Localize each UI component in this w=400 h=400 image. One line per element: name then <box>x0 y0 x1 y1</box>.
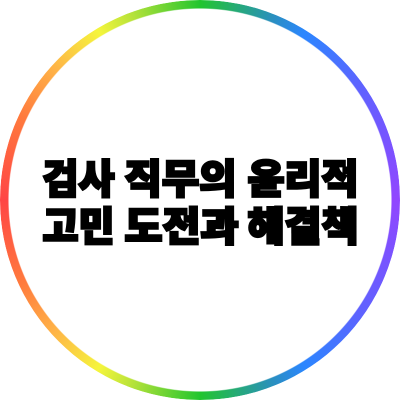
title line 1: 검사 <box>42 158 115 202</box>
title line 2: 해결책 <box>248 206 358 250</box>
title line 1: 직무의 <box>124 158 236 202</box>
title line 1 <box>42 158 358 202</box>
title line 2: 고민 <box>42 206 114 250</box>
title line 1: 윤리적 <box>248 158 358 202</box>
title line 2 <box>42 206 358 250</box>
title line 2: 도전과 <box>124 206 238 250</box>
